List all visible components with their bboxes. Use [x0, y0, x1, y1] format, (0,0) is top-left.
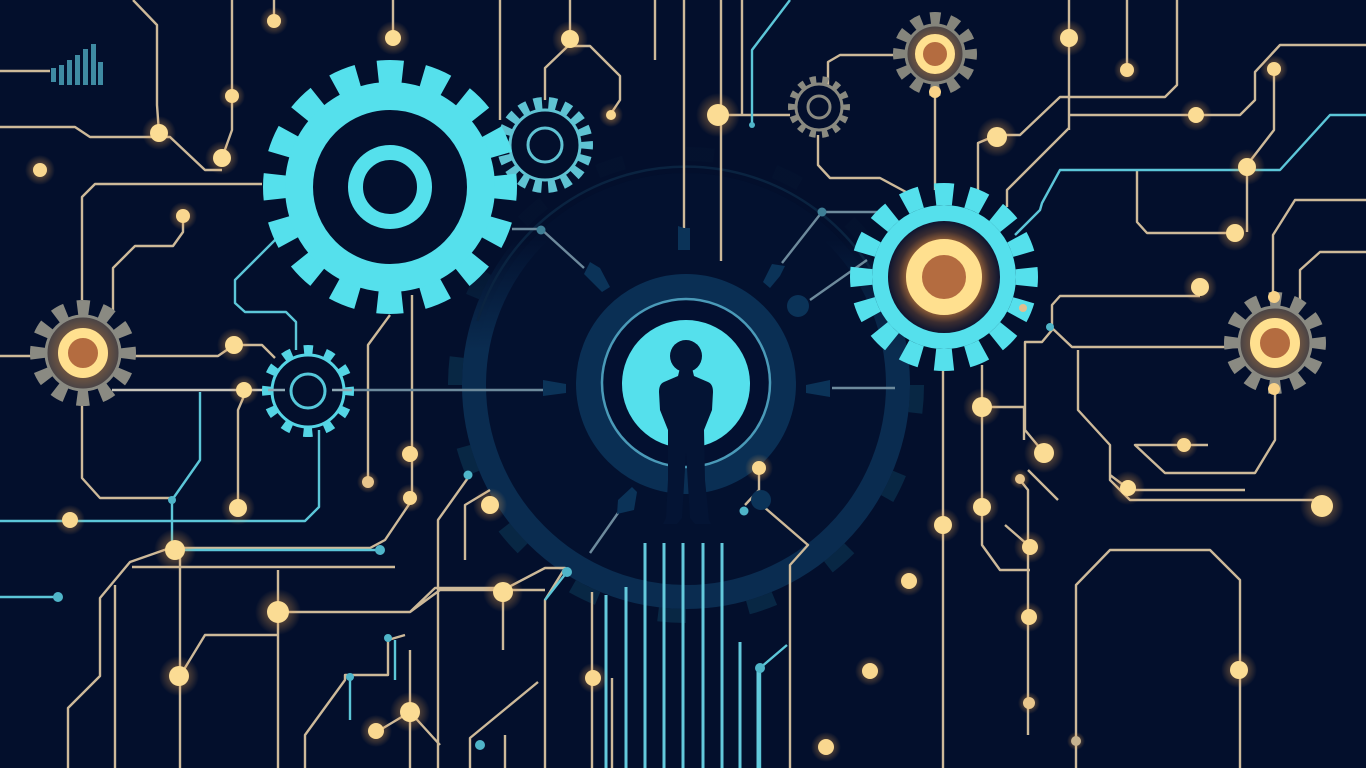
gear: grey with amber core left	[38, 308, 128, 398]
teal junction dots	[53, 122, 1054, 750]
gear: large teal top left	[274, 72, 506, 302]
gear: small teal left	[267, 350, 352, 432]
spoke end caps	[543, 226, 830, 514]
vertical teal bars below figure	[606, 543, 758, 768]
pale horizontal trace through left gears	[112, 389, 270, 391]
gear: grey top centre	[792, 80, 846, 134]
central figure in teal circle	[602, 299, 770, 524]
faint blue connector spokes	[332, 212, 895, 553]
gear: small teal near large gear	[503, 103, 587, 187]
gear: grey with amber core top right	[899, 18, 971, 98]
gear: large teal right with amber core	[861, 194, 1027, 360]
gear: grey with amber core right	[1231, 291, 1319, 395]
central radial backdrop	[455, 154, 917, 616]
icon: small bar chart	[51, 44, 103, 85]
